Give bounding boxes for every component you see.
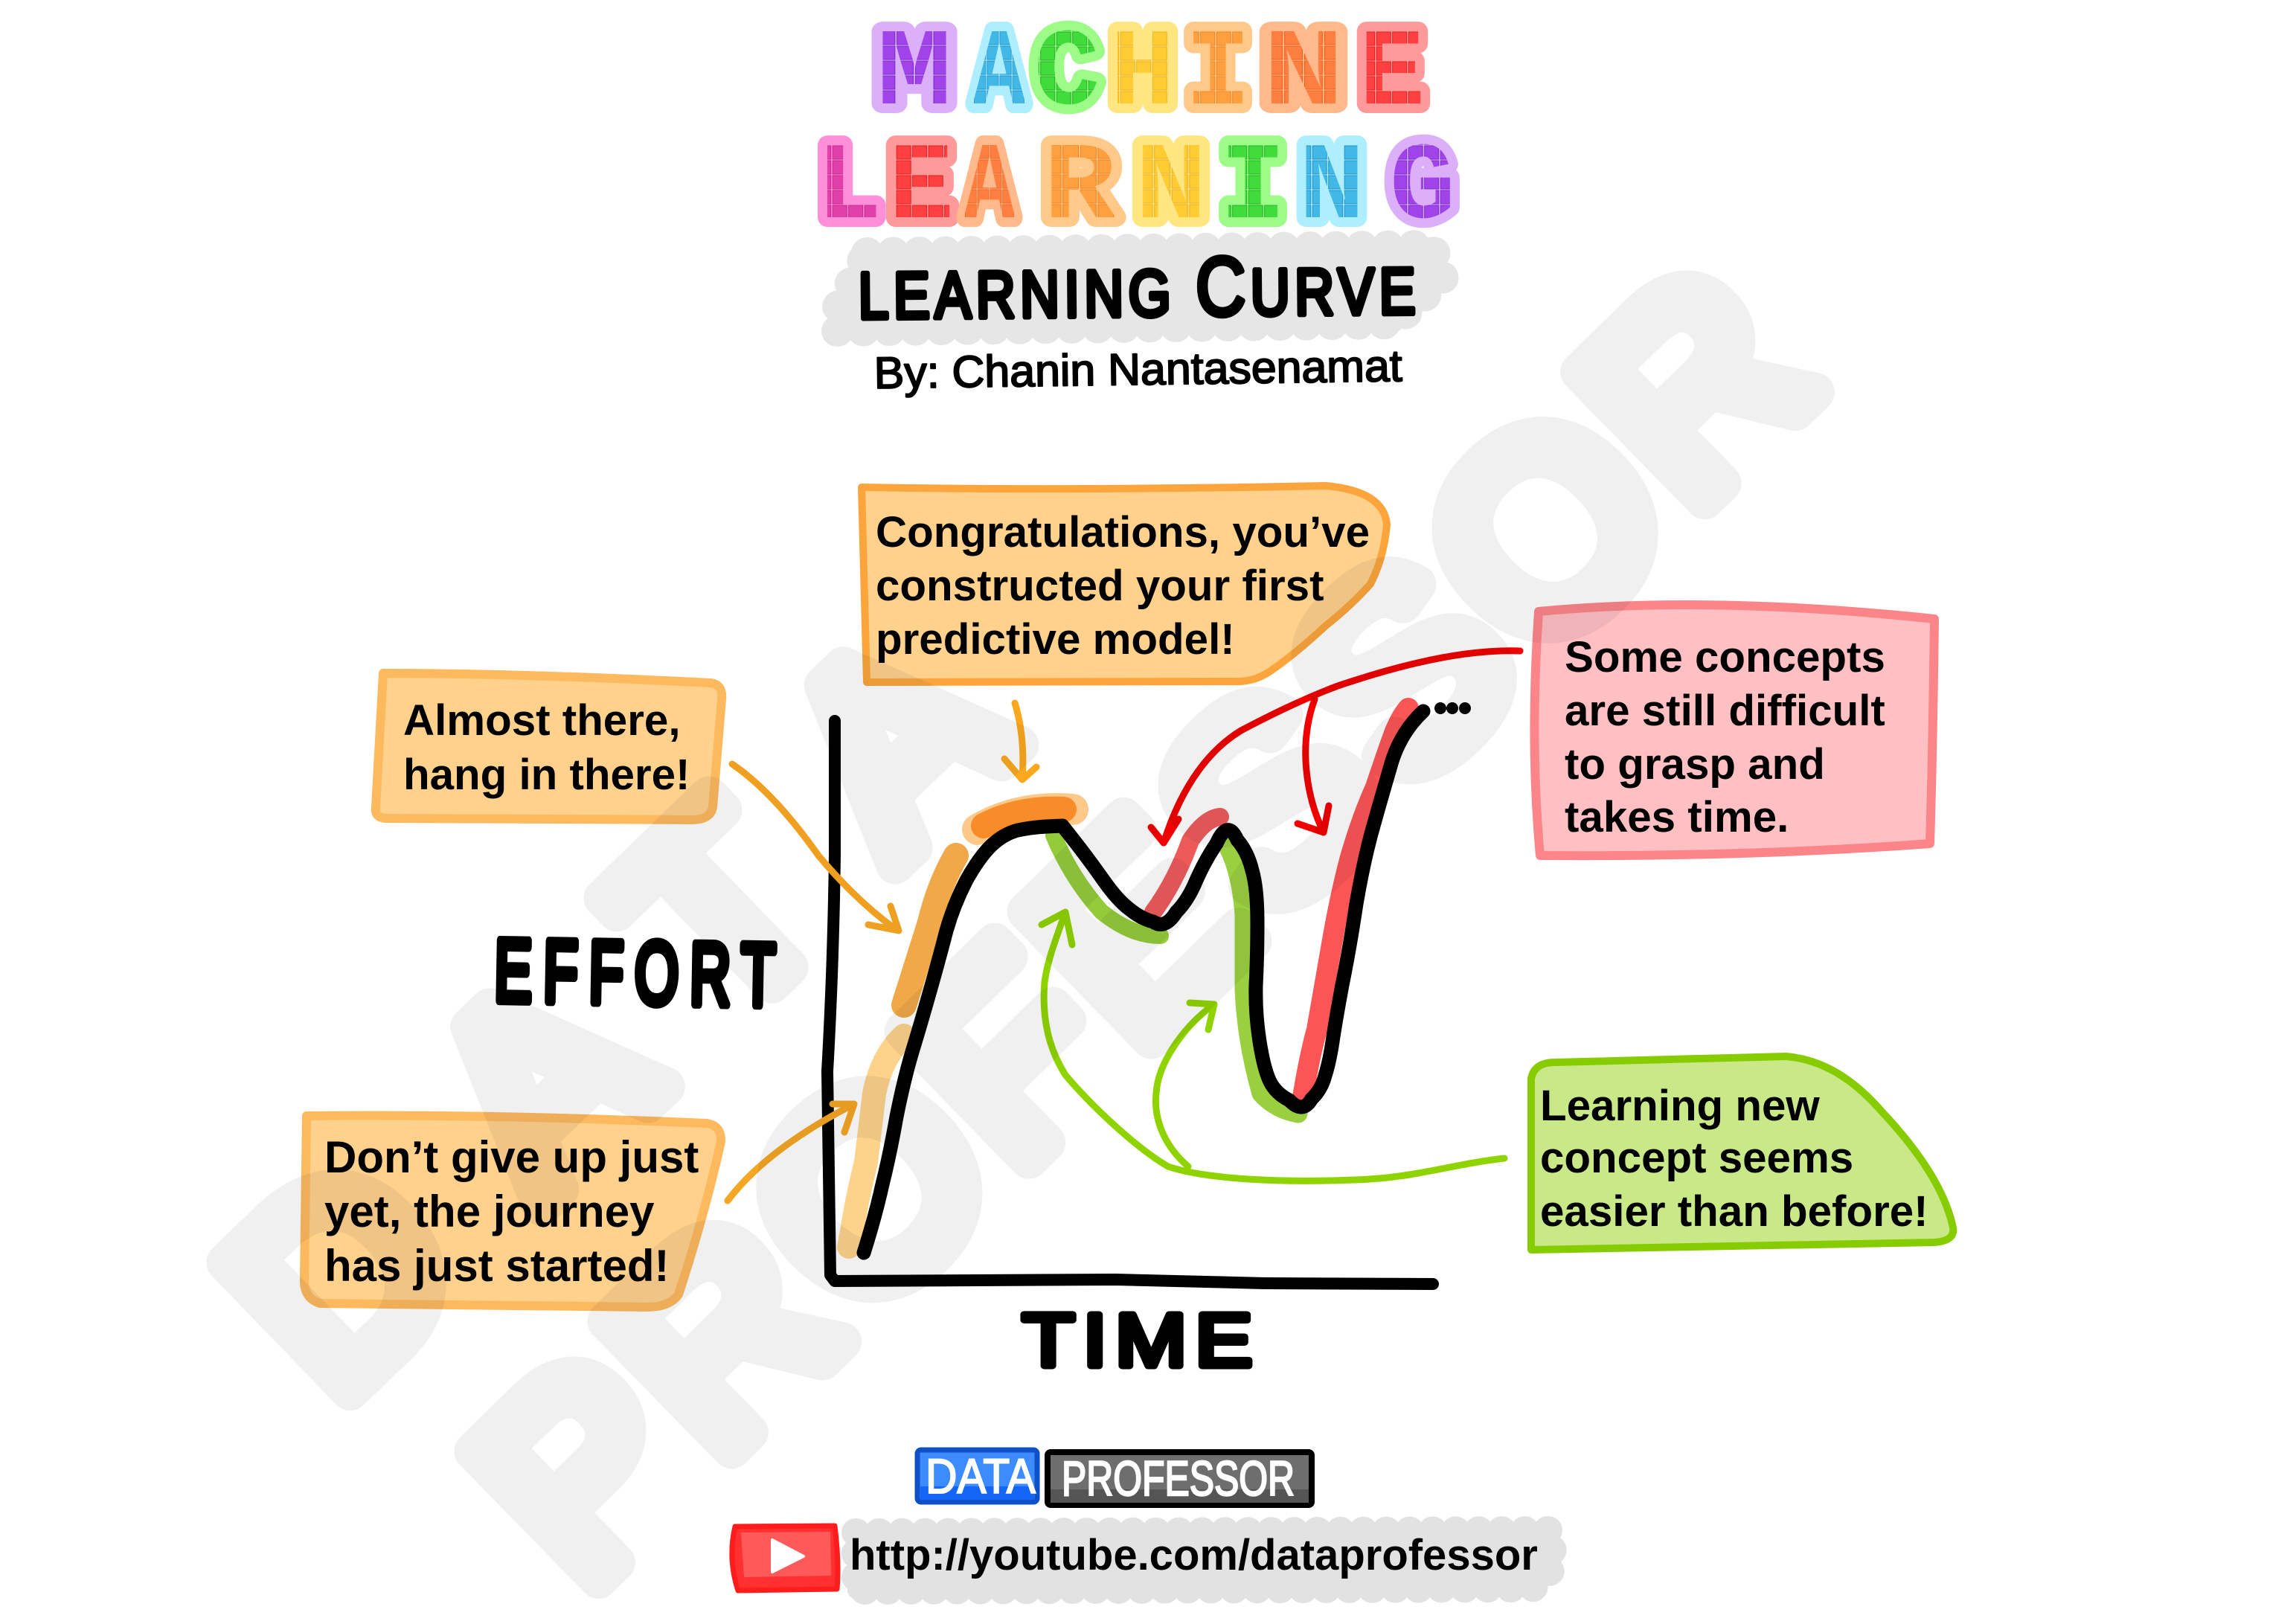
title: learning <box>816 126 1455 251</box>
highlight: red climb one <box>1153 817 1220 912</box>
callout: learning new concept <box>1531 1056 1953 1250</box>
callout: congratulations: constructed your first <box>876 562 1324 610</box>
callout: congratulations: Congratulations, you’ve <box>876 508 1370 556</box>
highlight: green descent one <box>1054 835 1161 936</box>
url text: http://youtube.com/dataprofessor <box>850 1531 1538 1579</box>
arrow: congratulations to peak <box>1004 703 1036 780</box>
title: learning: A <box>964 126 1016 251</box>
title: learning: N <box>1135 126 1208 251</box>
title: learning: L <box>816 127 882 251</box>
title: learning: N <box>1299 127 1365 251</box>
author byline: By: Chanin Nantasenamat <box>873 341 1402 398</box>
callout: don't give up: yet, the journey <box>324 1187 655 1236</box>
callout: almost there: Almost there, <box>403 696 681 745</box>
title: machine: C <box>1034 13 1100 137</box>
arrow: green concept to second descent <box>1155 1003 1214 1166</box>
highlight: almost there climb <box>904 856 956 1005</box>
url background blob <box>856 1530 1553 1591</box>
x-axis label: time: TIME <box>1022 1298 1261 1381</box>
callout: learning new concept: easier than before! <box>1540 1187 1928 1236</box>
callout: don't give up: Don’t give up just <box>324 1132 699 1182</box>
callout: congratulations <box>862 486 1387 682</box>
watermark: data professor: DATA <box>171 574 1059 1446</box>
callout: learning new concept: Learning new <box>1540 1082 1820 1130</box>
callout: some concepts: Some concepts <box>1565 633 1885 681</box>
axes <box>827 721 1433 1284</box>
title: learning: R <box>1043 126 1116 251</box>
highlight: green descent two <box>1226 844 1298 1114</box>
title: machine <box>876 12 1425 137</box>
callout: some concepts: to grasp and <box>1565 740 1825 789</box>
callout: don't give up: has just started! <box>324 1241 669 1291</box>
highlight: early climb <box>849 1036 904 1247</box>
title: learning: I <box>1220 127 1286 251</box>
subtitle: learning curve: LEARNING CURVE <box>858 238 1421 336</box>
callout: don't give up <box>304 1115 721 1307</box>
y-axis label: effort: EFFORT <box>494 921 788 1024</box>
callout: learning new concept: concept seems <box>1540 1134 1853 1182</box>
title: learning: G <box>1390 127 1455 251</box>
callout: some concepts: are still difficult <box>1565 687 1885 735</box>
title: machine: A <box>973 12 1025 136</box>
callout: some concepts <box>1534 605 1934 856</box>
title: machine: N <box>1263 12 1344 136</box>
highlight: red climb two <box>1303 708 1408 1097</box>
watermark: data professor: PROFESSOR <box>419 216 1863 1624</box>
arrow: green concept to first descent <box>1042 912 1504 1181</box>
icon: youtube play button <box>732 1526 838 1591</box>
arrow: red concepts to first climb <box>1151 651 1520 843</box>
highlight: first model peak <box>978 809 1073 829</box>
arrow: almost there to climb <box>732 764 899 931</box>
title: learning: E <box>888 127 954 251</box>
callout: almost there <box>376 673 722 820</box>
logo: professor badge: PROFESSOR <box>1062 1451 1295 1506</box>
arrow: don't give up to climb <box>728 1104 854 1201</box>
title: machine: E <box>1359 13 1425 137</box>
title: machine: H <box>1110 13 1176 137</box>
callout: some concepts: takes time. <box>1565 793 1789 841</box>
title: machine: M <box>876 13 952 137</box>
callout: almost there: hang in there! <box>403 751 690 799</box>
subtitle background blob <box>835 245 1443 331</box>
logo: data badge: DATA <box>926 1448 1036 1503</box>
learning curve line <box>864 702 1471 1253</box>
arrow: red concepts to second climb <box>1298 699 1329 832</box>
callout: congratulations: predictive model! <box>876 615 1235 664</box>
title: machine: I <box>1185 13 1251 137</box>
